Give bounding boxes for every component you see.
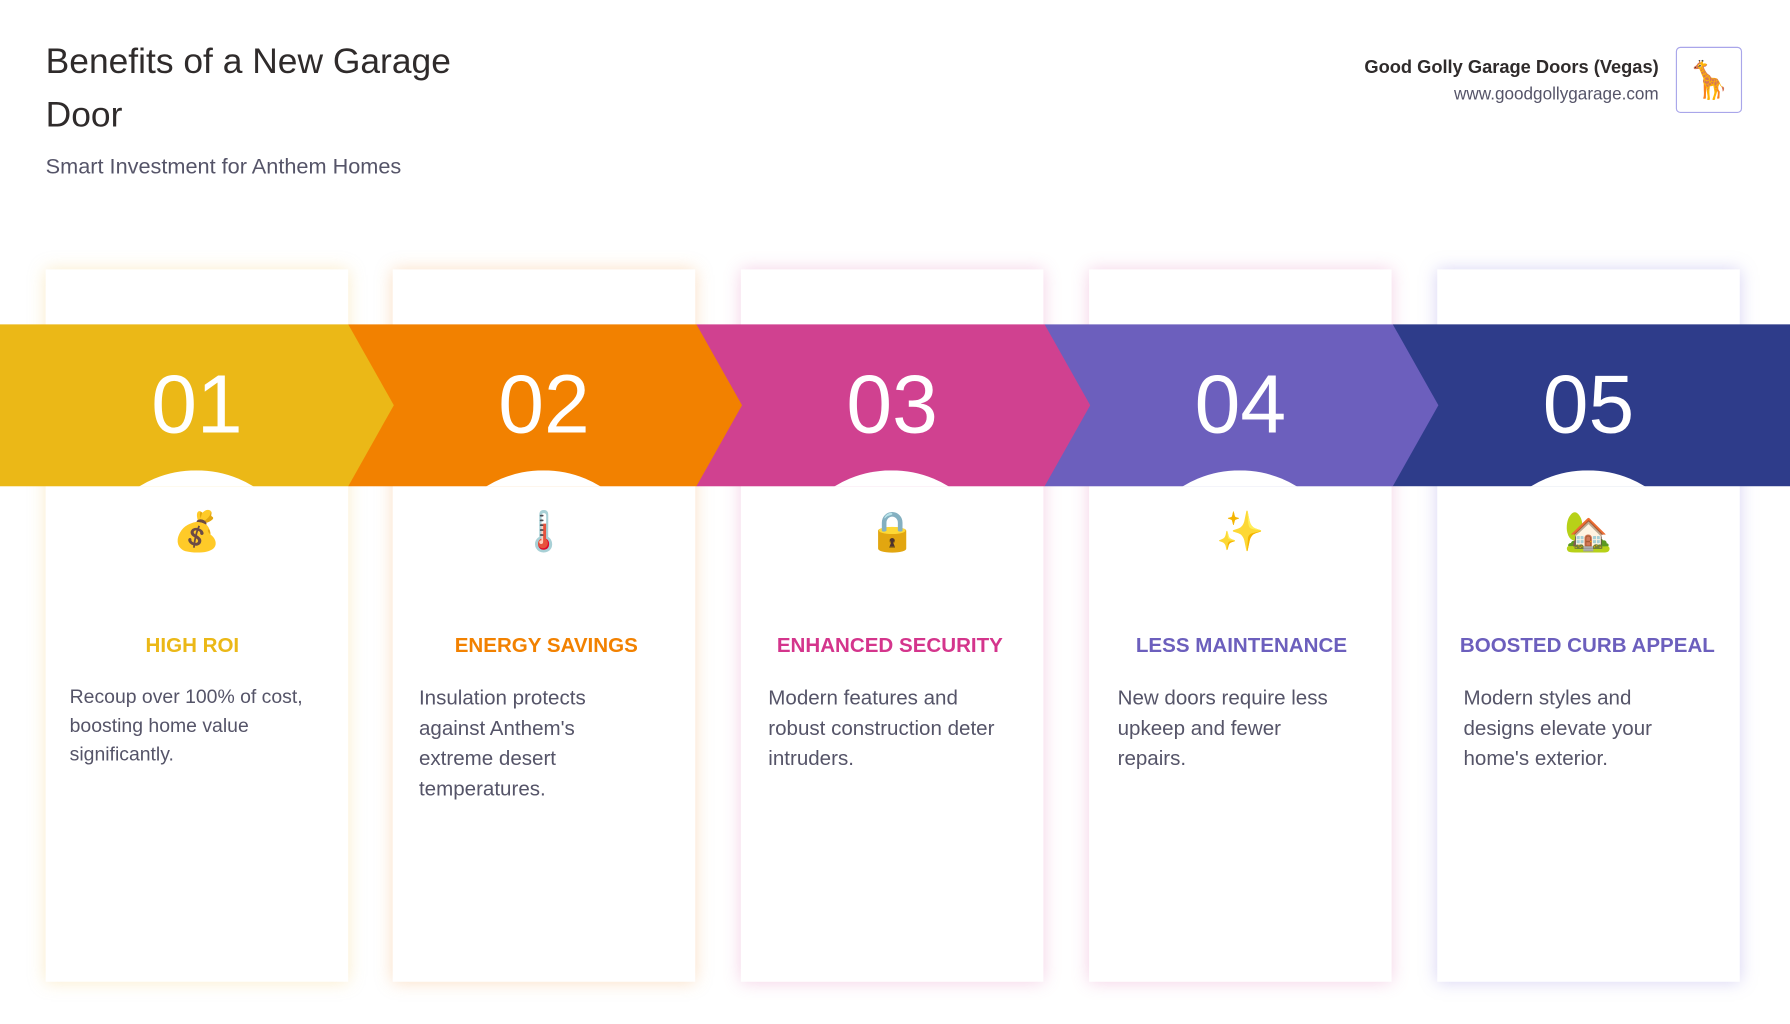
icon: sparkles: ✨ (1216, 509, 1264, 555)
brand name: Good Golly Garage Doors (Vegas) (1364, 58, 1659, 78)
subtitle: Smart Investment for Anthem Homes (46, 155, 401, 179)
text: 04 (1195, 360, 1286, 451)
icon: money bag: 💰 (173, 509, 221, 555)
text 5: Modern styles and designs elevate your home's exterior. (1464, 686, 1652, 769)
heading: maintenance: LESS MAINTENANCE (1136, 634, 1347, 656)
card caps (139, 470, 254, 486)
text: 02 (498, 360, 590, 451)
icon: lock: 🔒 (868, 509, 916, 555)
cards (46, 269, 348, 982)
icon: thermometer: 🌡️ (520, 509, 568, 555)
text 4: New doors require less upkeep and fewer repairs. (1118, 686, 1328, 769)
title: Benefits of a New Garage Door (46, 41, 451, 135)
arrow band (0, 324, 1790, 486)
text 2: Insulation protects against Anthem's extreme desert temperatures. (419, 686, 586, 800)
heading: security: ENHANCED SECURITY (777, 634, 1003, 656)
brand url: www.goodgollygarage.com (1454, 84, 1659, 104)
text: 05 (1543, 360, 1634, 451)
heading: curb appeal: BOOSTED CURB APPEAL (1460, 634, 1715, 656)
brand block (1364, 46, 1742, 113)
icon: house: 🏡 (1564, 509, 1613, 555)
text 1: Recoup over 100% of cost, boosting home value significantly. (70, 686, 303, 765)
heading: energy: ENERGY SAVINGS (455, 634, 638, 656)
text: 03 (846, 360, 938, 451)
heading: high roi: HIGH ROI (146, 634, 239, 656)
numbers: 01 (151, 360, 243, 451)
logo (1676, 47, 1742, 113)
logo: 🦒 (1686, 59, 1732, 100)
text 3: Modern features and robust construction deter intruders. (768, 686, 994, 769)
